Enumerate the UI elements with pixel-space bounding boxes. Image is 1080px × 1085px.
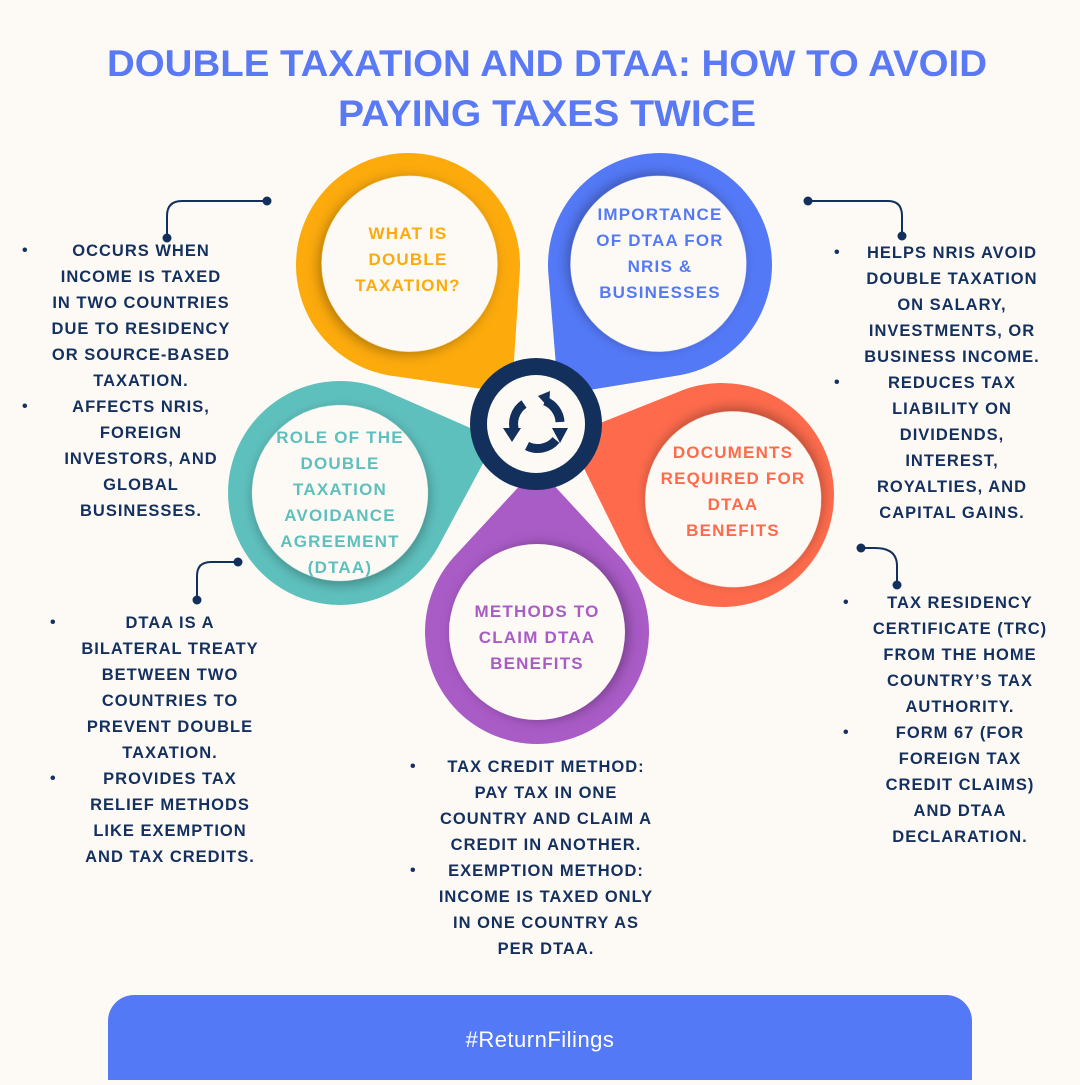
text block: documents: COUNTRY’S TAX [887,672,1033,690]
petal label: documents: REQUIRED FOR [661,469,805,488]
connector: bottom right [861,548,897,585]
text block: role of DTAA: BETWEEN TWO [102,666,238,684]
text block: what is double taxation: FOREIGN [100,424,182,442]
text block: importance: CAPITAL GAINS. [879,504,1025,522]
text block: documents: FROM THE HOME [883,646,1037,664]
text: • [410,758,417,775]
petal label: importance [596,205,724,302]
text block: importance: DIVIDENDS, [900,426,1004,444]
text block: methods: INCOME IS TAXED ONLY [439,888,653,906]
petal: teal [198,333,532,635]
petal label: methods [474,602,600,673]
text block: methods: TAX CREDIT METHOD: [447,758,645,776]
title: DOUBLE TAXATION AND DTAA: HOW TO AVOID [107,43,987,84]
text block: importance: ROYALTIES, AND [877,478,1027,496]
text block: methods: IN ONE COUNTRY AS [453,914,639,932]
text: • [22,398,29,415]
text: • [843,724,850,741]
center hub icon: cycle arrows [470,358,602,490]
petal label: documents [661,443,805,540]
text block: what is double taxation: IN TWO COUNTRIES [52,294,230,312]
text block: what is double taxation: OR SOURCE-BASED [52,346,230,364]
text: • [22,242,29,259]
text block: role of DTAA [50,614,259,866]
petal label: documents: DOCUMENTS [673,443,793,462]
text block: importance: BUSINESS INCOME. [864,348,1040,366]
text block: role of DTAA: COUNTRIES TO [102,692,238,710]
text block: importance: REDUCES TAX [888,374,1016,392]
petal label: methods: BENEFITS [490,654,584,673]
text block: importance: INTEREST, [905,452,999,470]
text block: documents: CERTIFICATE (TRC) [873,620,1047,638]
petal label: importance: OF DTAA FOR [596,231,724,250]
text block: role of DTAA: RELIEF METHODS [90,796,250,814]
text block: importance: LIABILITY ON [892,400,1012,418]
petal label: role of DTAA [276,428,404,577]
text block: documents: TAX RESIDENCY [887,594,1033,612]
text block: what is double taxation: DUE TO RESIDENCY [52,320,230,338]
text block: documents: FORM 67 (FOR [896,724,1024,742]
connector: top right [808,201,902,236]
footer bar: #ReturnFilings [466,1027,614,1052]
petal label: role of DTAA: AGREEMENT [280,532,400,551]
text: • [843,594,850,611]
text block: documents [843,594,1047,846]
text block: what is double taxation [22,242,230,520]
text block: role of DTAA: PREVENT DOUBLE [87,718,253,736]
text block: methods: PAY TAX IN ONE [475,784,617,802]
petal label: documents: DTAA [708,495,758,514]
petal label: role of DTAA: AVOIDANCE [284,506,396,525]
text block: importance: ON SALARY, [897,296,1007,314]
text block: role of DTAA: BILATERAL TREATY [81,640,259,658]
petal label: documents: BENEFITS [686,521,780,540]
petal label: role of DTAA: (DTAA) [308,558,372,577]
text block: documents: AUTHORITY. [906,698,1014,716]
petal label: importance: NRIS & [628,257,692,276]
petal: purple [425,467,649,744]
petal label: methods: CLAIM DTAA [479,628,595,647]
text block: what is double taxation: AFFECTS NRIS, [72,398,210,416]
text block: what is double taxation: INVESTORS, AND [64,450,218,468]
petal label: importance: IMPORTANCE [597,205,722,224]
text block: role of DTAA: PROVIDES TAX [103,770,237,788]
text block: role of DTAA: DTAA IS A [125,614,215,632]
connector: bottom left [197,562,238,600]
text block: importance: HELPS NRIS AVOID [867,244,1037,262]
footer bar [108,995,972,1080]
petal label: importance: BUSINESSES [599,283,721,302]
text block: documents: DECLARATION. [892,828,1028,846]
text block: role of DTAA: LIKE EXEMPTION [93,822,247,840]
text block: role of DTAA: AND TAX CREDITS. [85,848,255,866]
petal label: what is double taxation: DOUBLE [368,250,447,269]
text: • [410,862,417,879]
text block: documents: AND DTAA [914,802,1006,820]
petal label: what is double taxation: TAXATION? [355,276,461,295]
text block: methods: EXEMPTION METHOD: [448,862,644,880]
text block: what is double taxation: GLOBAL [103,476,179,494]
text block: what is double taxation: INCOME IS TAXED [61,268,221,286]
text block: importance [834,244,1040,522]
petal label: methods: METHODS TO [474,602,600,621]
text block: importance: INVESTMENTS, OR [869,322,1035,340]
text block: what is double taxation: TAXATION. [93,372,189,390]
title [107,43,987,134]
text block: what is double taxation: OCCURS WHEN [72,242,210,260]
text: • [50,614,57,631]
text block: documents: FOREIGN TAX [899,750,1021,768]
text block: methods: COUNTRY AND CLAIM A [440,810,652,828]
petal label: what is double taxation: WHAT IS [369,224,447,243]
petal label: role of DTAA: DOUBLE [300,454,379,473]
petal: blue [470,108,817,464]
petal label: what is double taxation [355,224,461,295]
petal label: role of DTAA: TAXATION [293,480,387,499]
text block: importance: DOUBLE TAXATION [866,270,1038,288]
text block: methods: PER DTAA. [498,940,594,958]
connector: top left [167,201,267,238]
text block: methods [410,758,653,958]
text: • [834,244,841,261]
petal: coral [528,331,867,640]
text block: documents: CREDIT CLAIMS) [886,776,1034,794]
text block: methods: CREDIT IN ANOTHER. [451,836,641,854]
title: PAYING TAXES TWICE [338,93,756,134]
petal: orange [250,107,599,464]
text block: role of DTAA: TAXATION. [122,744,218,762]
text: • [834,374,841,391]
text block: what is double taxation: BUSINESSES. [80,502,202,520]
text: • [50,770,57,787]
petal label: role of DTAA: ROLE OF THE [276,428,404,447]
